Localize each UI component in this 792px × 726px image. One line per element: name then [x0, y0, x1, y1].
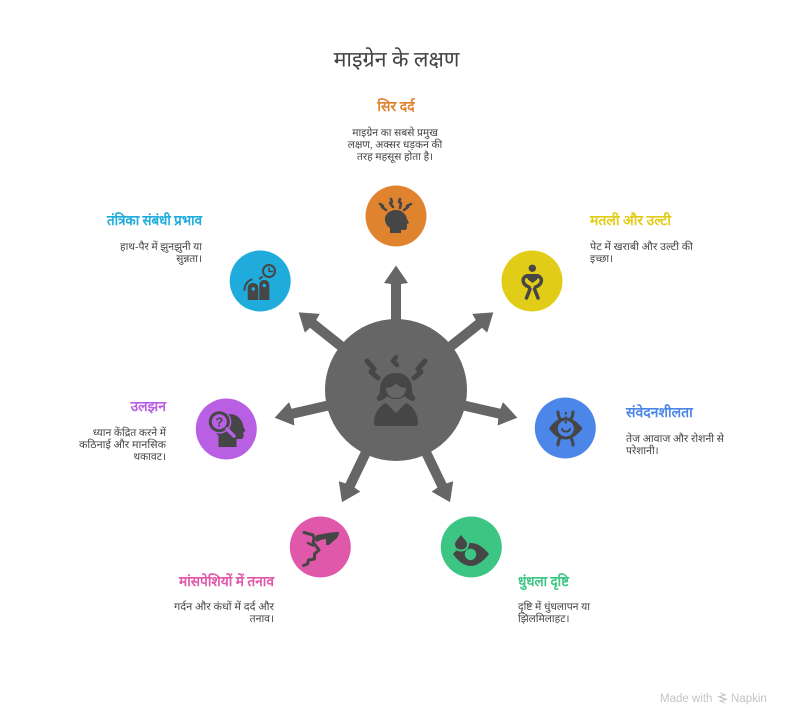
description: तनाव। [250, 614, 274, 625]
arrow: left [272, 392, 340, 429]
description: तेज आवाज और रोशनी से [626, 432, 725, 445]
icon: head with lightning [380, 199, 411, 233]
central circle [325, 319, 467, 461]
icon: person holding stomach [523, 265, 541, 298]
description [626, 432, 725, 457]
description: माइग्रेन का सबसे प्रमुख [352, 126, 438, 139]
description: झिलमिलाहट। [518, 612, 569, 625]
node: lower left, muscle tension [174, 516, 351, 625]
node: upper left, neurological effects [106, 212, 291, 312]
description: ध्यान केंद्रित करने में [93, 426, 167, 439]
heading: सिर दर्द [376, 98, 415, 115]
icon circle [366, 186, 426, 246]
description: दृष्टि में धुंधलापन या [518, 600, 590, 613]
heading: तंत्रिका संबंधी प्रभाव [106, 212, 203, 229]
icon circle [196, 398, 257, 460]
description: गर्दन और कंधों में दर्द और [174, 600, 275, 613]
heading: मतली और उल्टी [589, 212, 672, 229]
heading: संवेदनशीलता [625, 404, 694, 421]
icon circle [441, 516, 502, 578]
heading: उलझन [129, 400, 167, 415]
icon: head with question magnifier [210, 413, 246, 447]
description: परेशानी। [626, 444, 659, 457]
icon: eye with drop [453, 533, 489, 566]
icon circle [290, 516, 351, 578]
description [590, 240, 693, 265]
node: right, sensitivity [535, 398, 725, 458]
arrow: upper right [435, 303, 501, 362]
arrow: lower left [331, 439, 381, 507]
central hub with arrows [272, 266, 520, 507]
arrow: upper left [291, 303, 357, 362]
node: top, headache [348, 98, 443, 246]
description: इच्छा। [590, 254, 613, 265]
icon circle [535, 398, 596, 458]
description [79, 426, 167, 463]
watermark: Made with Napkin [660, 692, 767, 705]
description: सुन्नता। [176, 254, 202, 265]
icon: eye with rays [549, 412, 582, 445]
arrow: right [452, 392, 520, 429]
icon: fingers with clock [244, 265, 275, 300]
watermark: Made with Napkin: Made with [660, 693, 712, 705]
description: हाथ-पैर में झुनझुनी या [120, 240, 202, 253]
heading: मांसपेशियों में तनाव [178, 573, 275, 590]
description: पेट में खराबी और उल्टी की [590, 240, 693, 253]
arrow: top [384, 266, 408, 330]
icon: head with question magnifier: ? [215, 414, 223, 430]
description [174, 600, 275, 625]
icon circle [230, 250, 291, 312]
description: लक्षण, अक्सर धड़कन की [348, 138, 443, 151]
heading: धुंधला दृष्टि [518, 573, 570, 591]
node: left, confusion [79, 398, 257, 463]
icon: woman with headache [367, 357, 425, 426]
title: माइग्रेन के लक्षण [334, 46, 460, 72]
description [120, 240, 202, 265]
watermark: Made with Napkin: Napkin [731, 693, 767, 705]
icon: face profile with pain [304, 532, 339, 566]
icon circle [502, 250, 562, 312]
arrow: lower right [411, 439, 461, 507]
description [518, 600, 590, 625]
node: lower right, blurred vision [441, 516, 590, 625]
description [348, 126, 443, 163]
node: upper right, nausea [502, 212, 693, 312]
description: थकावट। [133, 452, 166, 463]
description: कठिनाई और मानसिक [79, 438, 167, 451]
description: तरह महसूस होता है। [357, 150, 433, 163]
